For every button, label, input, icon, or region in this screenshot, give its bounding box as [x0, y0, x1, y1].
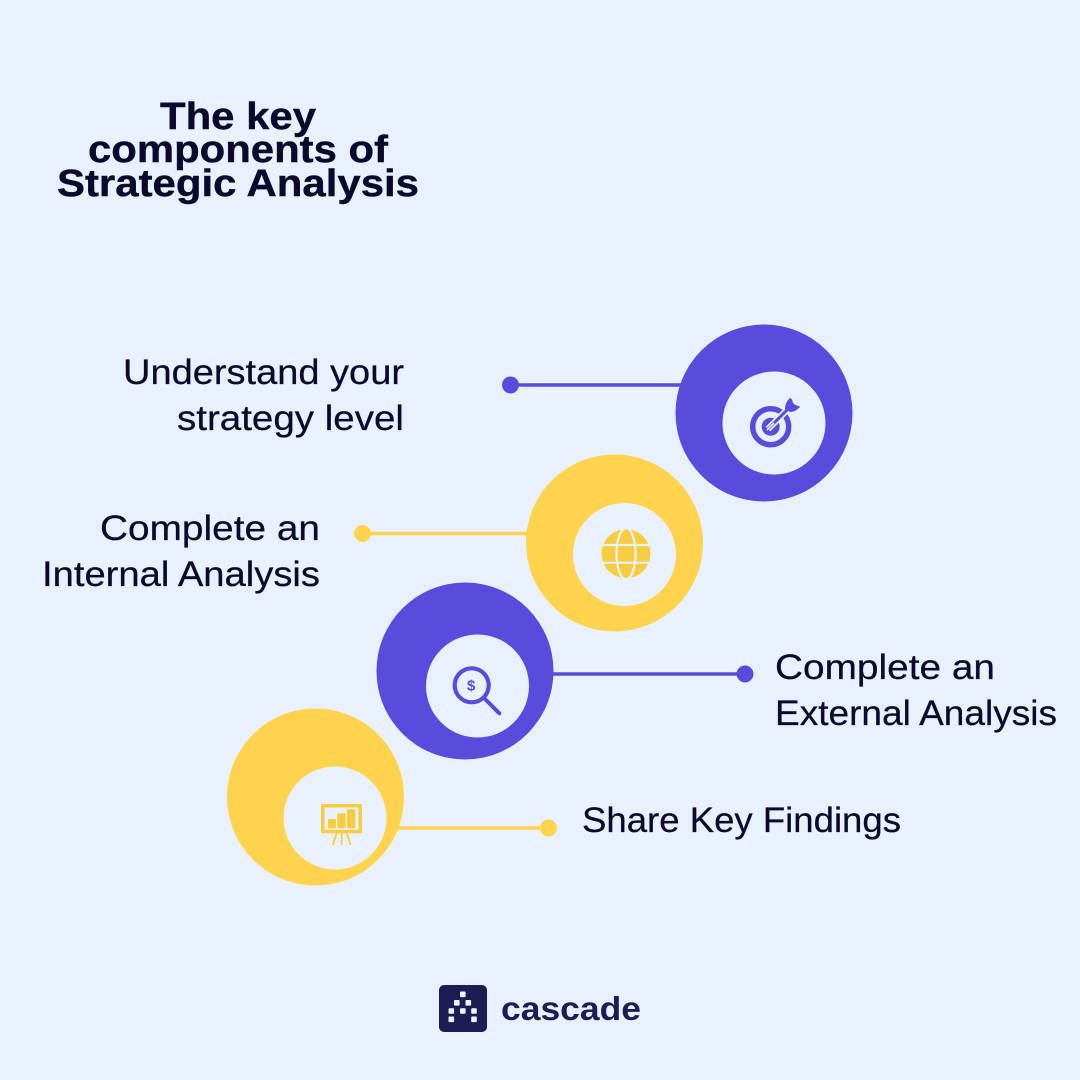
ring: step 1 [676, 324, 852, 502]
step 3: complete an external analysis [376, 582, 1057, 760]
ring: step 2 [526, 454, 703, 632]
connector: step 3 [545, 666, 754, 682]
wordmark: cascade [501, 990, 641, 1027]
icon: presentation board with bars [323, 806, 360, 845]
step 2: complete an internal analysis [42, 454, 703, 632]
ring: step 3 [376, 582, 554, 760]
label: step 1: Understand your [123, 353, 404, 392]
label: step 3: Complete an [775, 648, 995, 687]
title [57, 96, 419, 205]
label: step 3 [775, 648, 1057, 733]
title: Strategic Analysis [57, 163, 419, 205]
icon: magnifier with dollar [455, 668, 499, 713]
label: step 2: Internal Analysis [42, 555, 320, 594]
icon: target with dart [753, 398, 800, 445]
label: step 1 [123, 353, 404, 438]
connector: step 2 [354, 525, 535, 542]
logo: cascade [439, 985, 641, 1032]
label: step 2: Complete an [100, 509, 320, 548]
label: step 1: strategy level [177, 399, 404, 438]
title: components of [88, 129, 388, 171]
connector: step 1 [502, 376, 690, 394]
step 4: share key findings [227, 708, 901, 886]
label: step 3: External Analysis [775, 694, 1057, 733]
connector: step 4 [395, 820, 557, 836]
icon: globe [600, 528, 652, 579]
label: step 4: Share Key Findings [582, 801, 901, 840]
icon: cascade mark [439, 985, 487, 1032]
label: step 2 [42, 509, 320, 594]
icon: magnifier with dollar: $ [467, 678, 476, 694]
step 1: understand your strategy level [123, 324, 852, 502]
title: The key [160, 96, 316, 138]
ring: step 4 [227, 708, 404, 886]
